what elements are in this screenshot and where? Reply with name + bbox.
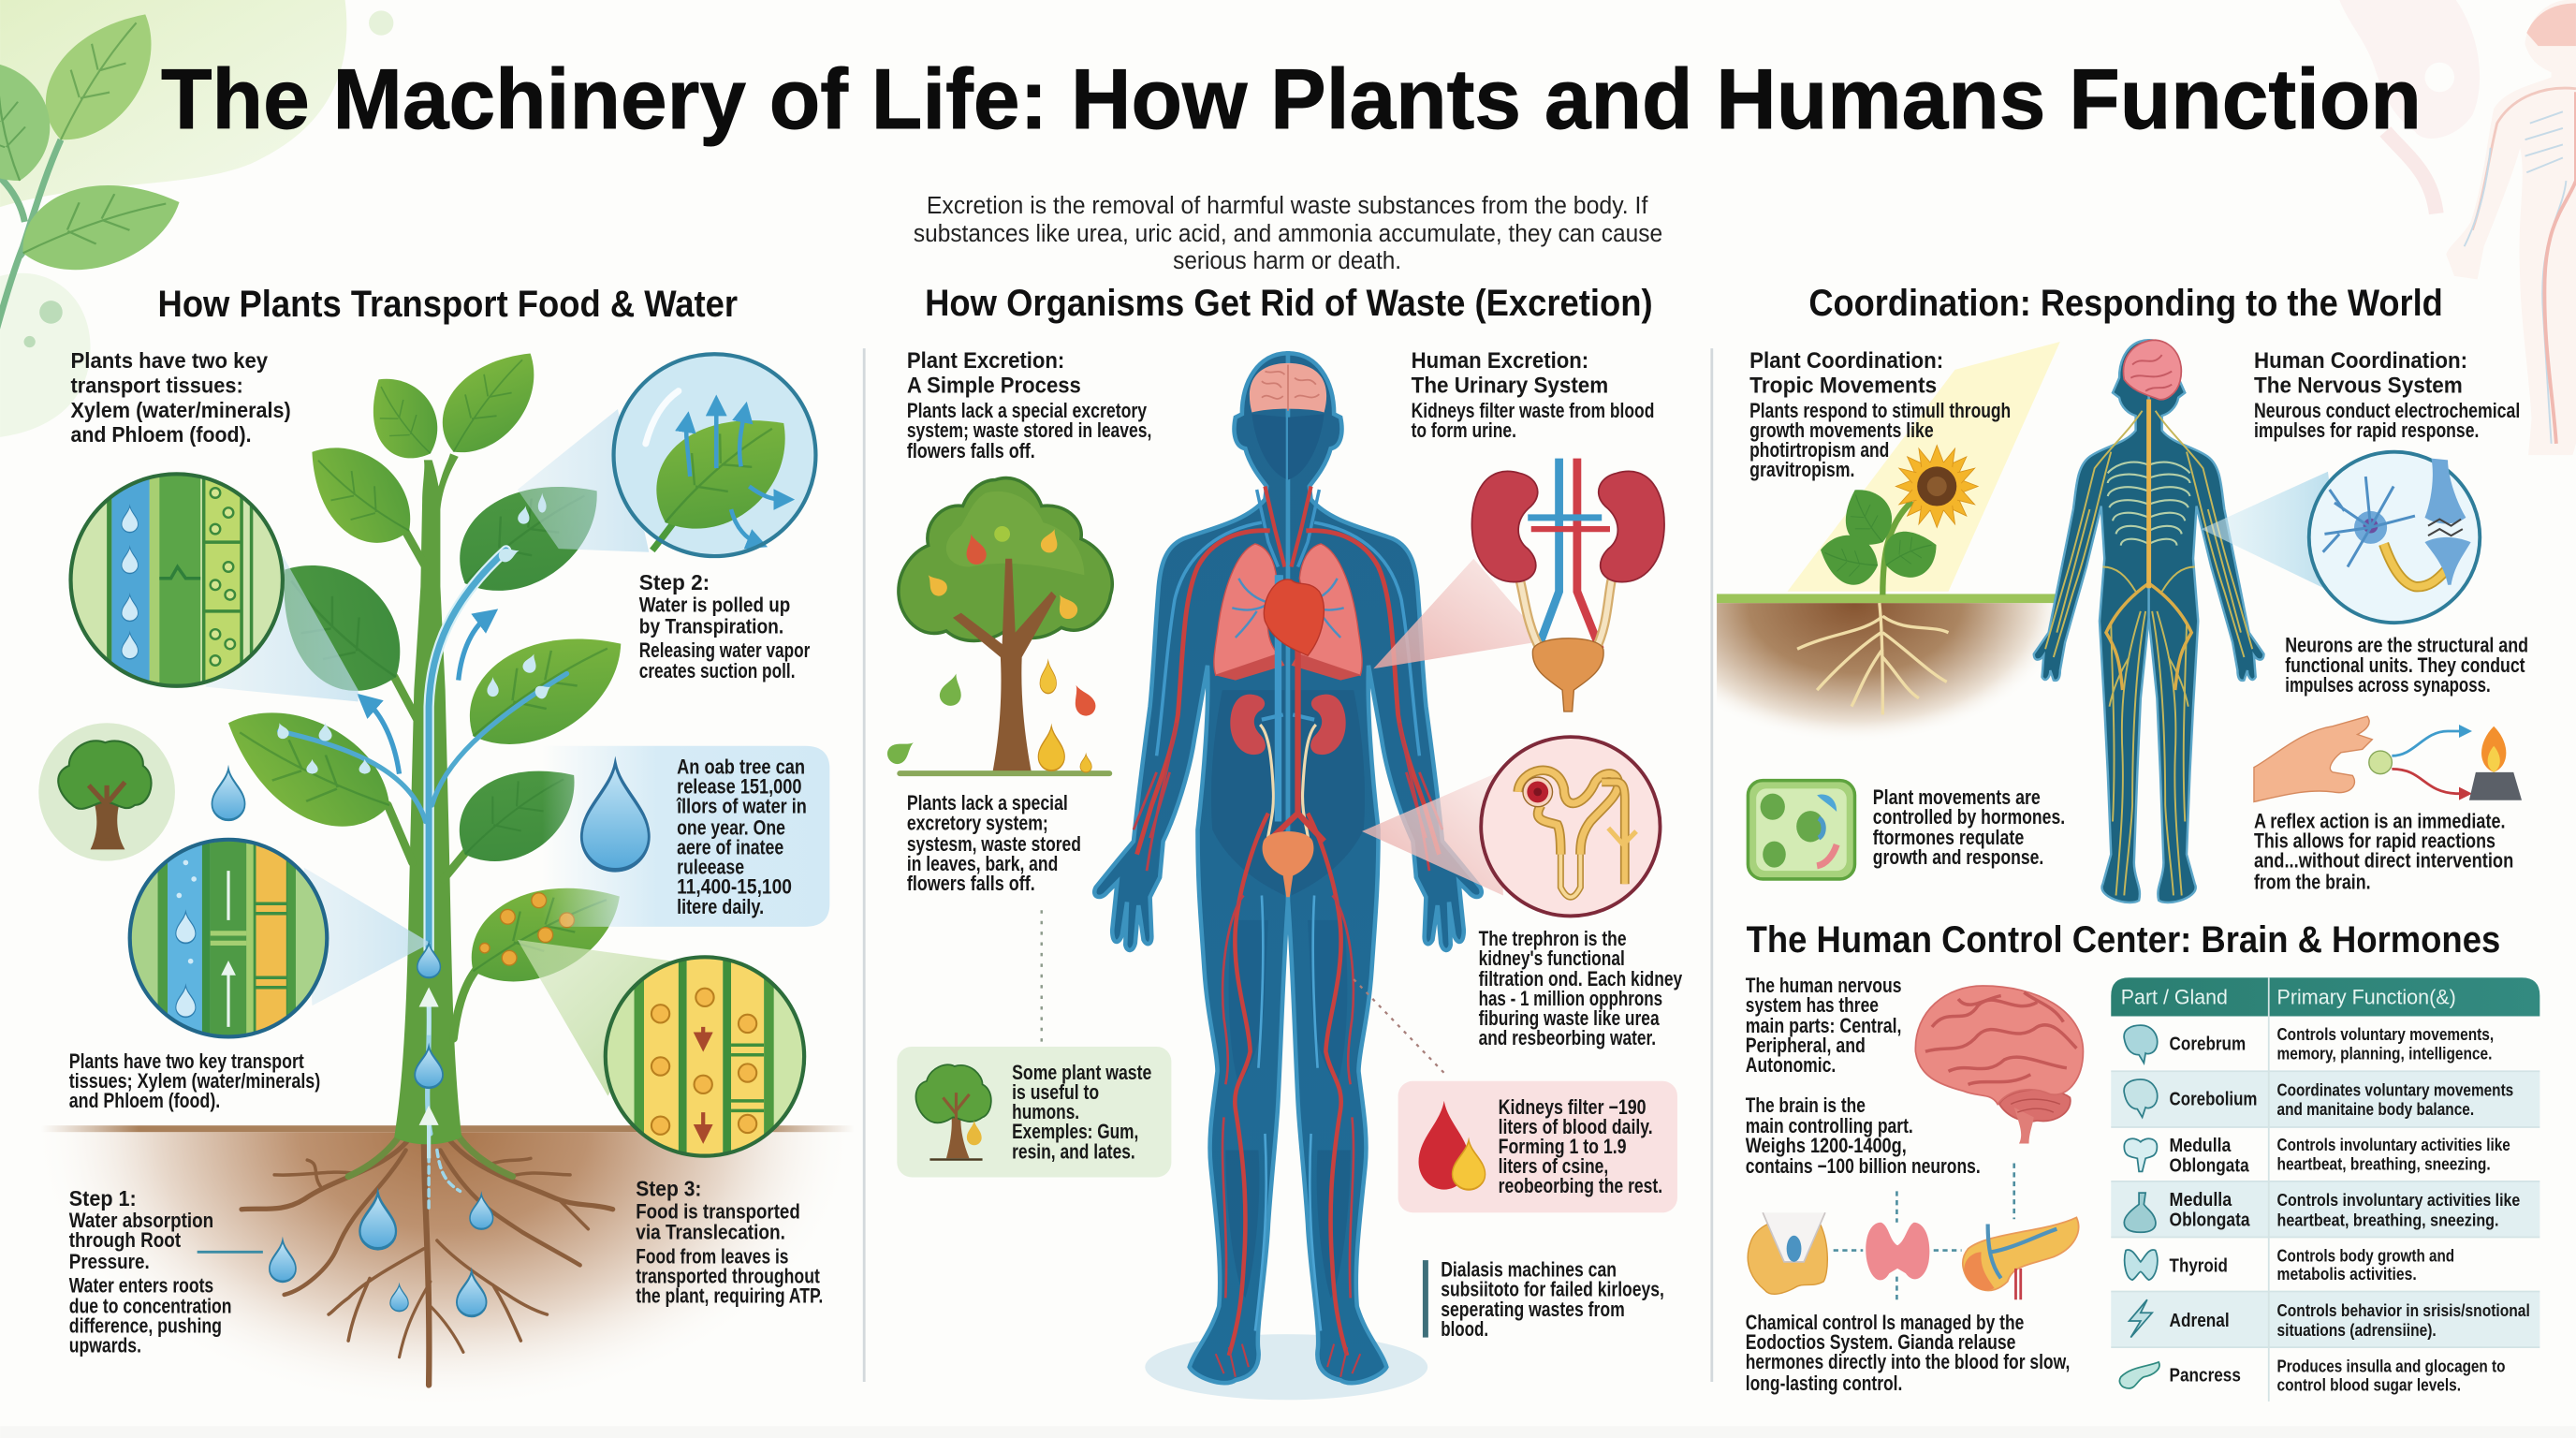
- intro text: [914, 191, 1662, 274]
- text: human coordination: Human Coordination:: [2254, 348, 2467, 374]
- table: parts and functions: [2111, 977, 2539, 1401]
- panel: excretion: [884, 283, 1682, 1400]
- heading: plant transport: How Plants Transport Food & Water: [158, 284, 738, 325]
- text: plant coordination: Plants respond to stimull through: [1749, 399, 2011, 422]
- dashed connectors: [1834, 1164, 2014, 1299]
- plant leaves: [206, 330, 643, 1005]
- text: human coordination: The Nervous System: [2254, 373, 2463, 398]
- text: step 1: through Root: [69, 1228, 181, 1252]
- illustration: sunlight and soil: [1717, 342, 2062, 742]
- row: cerebellum: Corebolium: [2170, 1090, 2257, 1110]
- blue flow arrows: [368, 618, 487, 774]
- text: key tissues: Plants have two key: [71, 348, 268, 373]
- row: medulla oblongata: [2124, 1135, 2510, 1176]
- text: human coordination: impulses for rapid response.: [2254, 418, 2479, 442]
- illustration: neuron circle: [2202, 452, 2480, 623]
- row: thyroid: [2125, 1245, 2454, 1284]
- table header: Primary Function(&): [2277, 985, 2456, 1008]
- text: nephron: [1479, 927, 1682, 1049]
- panel: control center: [1746, 919, 2539, 1401]
- callout: kidney filtration: Forming 1 to 1.9: [1499, 1135, 1627, 1158]
- row: cerebellum: [2124, 1079, 2513, 1119]
- text: step 3: via Translecation.: [636, 1220, 785, 1243]
- row: medulla oblongata repeat: Medulla: [2170, 1190, 2232, 1211]
- callout: useful plant waste: is useful to: [1012, 1080, 1099, 1104]
- note: dialysis: blood.: [1441, 1317, 1488, 1341]
- callout: oak tree fact: [542, 746, 829, 927]
- text: human excretion: Human Excretion:: [1412, 348, 1588, 374]
- text: key tissues: and Phloem (food).: [71, 422, 252, 447]
- leaf water dots and yellow food dots: [274, 493, 574, 965]
- text: step 1: due to concentration: [69, 1294, 232, 1317]
- brain: [1250, 363, 1326, 413]
- text: step 3: Food from leaves is: [636, 1245, 788, 1269]
- table header: Part / Gland: [2121, 985, 2228, 1008]
- callout: oak tree fact: îllors of water in: [676, 795, 807, 818]
- dotted connector: [1041, 910, 1043, 1043]
- text: plant coordination: photirtropism and: [1749, 438, 1889, 462]
- text: key tissues: [71, 348, 291, 447]
- vessels: [1276, 575, 1281, 822]
- illustration: human body shadow: [1145, 1334, 1427, 1400]
- row: medulla oblongata repeat: heartbeat, breathing, sneezing.: [2277, 1210, 2498, 1229]
- text: reflex: from the brain.: [2254, 870, 2371, 893]
- text: brain facts: [1746, 1093, 1981, 1178]
- icon: blood and urine drops: [1419, 1101, 1486, 1190]
- text: reflex: and...without direct intervention: [2254, 849, 2513, 873]
- text: plant hormones: Plant movements are: [1873, 785, 2041, 809]
- text: step 3: Step 3:: [636, 1177, 701, 1201]
- illustration: sunflower: [1797, 446, 1978, 714]
- text: plant coordination: growth movements like: [1749, 418, 1934, 442]
- soil and ground: [33, 1125, 855, 1410]
- text: tissues recap: Plants have two key transport: [69, 1049, 304, 1073]
- panel: coordination: [1717, 283, 2528, 902]
- text: nervous system parts: [1746, 974, 1902, 1077]
- decoration: top-left leaves: [0, 0, 393, 437]
- text: tissues recap: and Phloem (food).: [69, 1089, 220, 1112]
- panel: plant transport: [33, 284, 855, 1410]
- pointer line: [198, 1251, 263, 1253]
- text: nephron: and resbeorbing water.: [1479, 1026, 1656, 1049]
- illustration: nephron circle: [1362, 737, 1661, 916]
- intro text: Excretion is the removal of harmful waste substances from the body. If: [927, 191, 1648, 219]
- row: medulla oblongata: Medulla: [2170, 1136, 2232, 1156]
- dotted connector: [1354, 979, 1444, 1073]
- cone to leaf circle: [518, 409, 649, 552]
- row: thyroid: Thyroid: [2170, 1255, 2228, 1276]
- text: neurons: [2285, 634, 2528, 697]
- row: adrenal: Controls behavior in srisis/snotional: [2277, 1300, 2530, 1320]
- text: step 3: [636, 1177, 823, 1308]
- text: chemical control: hermones directly into the blood for slow,: [1746, 1350, 2070, 1373]
- text: human excretion: to form urine.: [1412, 418, 1516, 442]
- callout: oak tree fact: one year. One: [677, 816, 785, 840]
- intro text: serious harm or death.: [1173, 246, 1401, 274]
- text: step 1: Step 1:: [69, 1186, 137, 1211]
- illustration: glands: [1748, 1212, 2079, 1299]
- text: brain facts: main controlling part.: [1746, 1114, 1913, 1137]
- icon: small drop: [212, 769, 245, 820]
- note: dialysis: Dialasis machines can: [1441, 1258, 1617, 1282]
- text: plants lack: excretory system;: [907, 811, 1048, 834]
- text: human excretion: Kidneys filter waste from blood: [1412, 399, 1654, 422]
- text: nervous system parts: Autonomic.: [1746, 1053, 1836, 1077]
- text: tissues recap: tissues; Xylem (water/minerals): [69, 1069, 320, 1093]
- icon: plant cell: [1748, 781, 1854, 879]
- circle: transpiration leaf: [614, 354, 815, 556]
- text: nephron: has - 1 million opphrons: [1479, 987, 1662, 1010]
- icon: tree badge: [38, 723, 175, 861]
- text: nephron: filtration ond. Each kidney: [1479, 967, 1682, 990]
- text: plant excretion: Plants lack a special excretory: [907, 399, 1147, 422]
- row: medulla oblongata: Oblongata: [2170, 1155, 2249, 1176]
- row: pancreas: Pancress: [2170, 1366, 2241, 1387]
- water veins: [279, 550, 567, 1208]
- text: reflex: This allows for rapid reactions: [2254, 829, 2496, 853]
- text: plant excretion: A Simple Process: [907, 373, 1081, 398]
- stem droplets and arrows: [415, 943, 443, 1158]
- text: chemical control: [1746, 1311, 2070, 1395]
- callout: useful plant waste: Exemples: Gum,: [1012, 1120, 1138, 1143]
- brain: [2123, 340, 2181, 400]
- row: medulla oblongata: heartbeat, breathing, sneezing.: [2277, 1154, 2491, 1174]
- text: chemical control: Eodoctios System. Gianda relause: [1746, 1330, 2015, 1354]
- row: adrenal: Adrenal: [2170, 1311, 2230, 1331]
- callout: useful plant waste: [897, 1047, 1171, 1177]
- divider right: [1711, 348, 1713, 1382]
- row: cerebrum: memory, planning, intelligence.: [2277, 1043, 2492, 1063]
- stem and branches: [388, 453, 476, 1144]
- text: step 3: Food is transported: [636, 1199, 800, 1223]
- bladder: [1263, 831, 1313, 897]
- row: cerebrum: [2124, 1024, 2494, 1064]
- text: neurons: impulses across synaposs.: [2285, 673, 2491, 697]
- text: nervous system parts: Peripheral, and: [1746, 1034, 1866, 1057]
- text: step 3: transported throughout: [636, 1265, 820, 1288]
- row: cerebrum: Controls voluntary movements,: [2277, 1024, 2494, 1044]
- row: medulla oblongata: Controls involuntary activities like: [2277, 1135, 2510, 1154]
- cone to stem circle: [304, 868, 431, 1005]
- text: reflex: [2254, 810, 2513, 893]
- text: brain facts: Weighs 1200-1400g,: [1746, 1134, 1907, 1157]
- root water drops: [270, 1193, 493, 1316]
- spinal cord: [2147, 399, 2150, 588]
- text: plant excretion: Plant Excretion:: [907, 348, 1064, 374]
- text: brain facts: contains −100 billion neurons.: [1746, 1154, 1981, 1178]
- text: nephron: fiburing waste like urea: [1479, 1006, 1660, 1030]
- text: nervous system parts: system has three: [1746, 993, 1879, 1017]
- text: step 2: Step 2:: [639, 570, 710, 594]
- illustration: human circulatory body: [1094, 353, 1482, 1383]
- divider left: [863, 348, 865, 1382]
- icon: tree with resin: [915, 1064, 991, 1161]
- heading: control center: The Human Control Center: Brain & Hormones: [1747, 919, 2500, 961]
- intro text: substances like urea, uric acid, and ammonia accumulate, they can cause: [914, 219, 1662, 247]
- text: plant hormones: ftormones requlate: [1873, 826, 2024, 849]
- callout: useful plant waste: humons.: [1012, 1100, 1079, 1123]
- row: cerebellum: and manitaine body balance.: [2277, 1099, 2474, 1119]
- note: dialysis: seperating wastes from: [1441, 1298, 1625, 1321]
- text: nervous system parts: The human nervous: [1746, 974, 1902, 997]
- callout: kidney filtration: liters of csine,: [1499, 1154, 1608, 1178]
- callout: oak tree fact: litere daily.: [677, 895, 764, 918]
- text: step 1: difference, pushing: [69, 1313, 222, 1337]
- text: step 2: Releasing water vapor: [639, 638, 811, 662]
- callout: kidney filtration: reobeorbing the rest.: [1499, 1174, 1662, 1197]
- row: thyroid: Controls body growth and: [2277, 1245, 2454, 1265]
- callout: oak tree fact: An oab tree can: [677, 756, 805, 779]
- text: step 2: by Transpiration.: [639, 615, 783, 638]
- text: tissues recap: [69, 1049, 320, 1112]
- text: neurons: functional units. They conduct: [2285, 653, 2525, 677]
- text: plant hormones: [1873, 785, 2065, 869]
- circle: xylem and phloem tissue: [71, 473, 285, 687]
- text: reflex: A reflex action is an immediate.: [2254, 810, 2505, 833]
- text: step 2: Water is polled up: [639, 594, 790, 617]
- row: pancreas: control blood sugar levels.: [2277, 1375, 2461, 1395]
- text: plants lack: in leaves, bark, and: [907, 852, 1058, 875]
- row: cerebellum: Coordinates voluntary movements: [2277, 1080, 2513, 1100]
- row: medulla oblongata repeat: Controls involuntary activities like: [2277, 1190, 2520, 1210]
- text: step 2: creates suction poll.: [639, 659, 795, 682]
- text: key tissues: Xylem (water/minerals): [71, 398, 291, 422]
- text: human excretion: The Urinary System: [1412, 373, 1608, 398]
- text: plant excretion: system; waste stored in leaves,: [907, 418, 1151, 442]
- roots: [242, 1134, 613, 1385]
- row: cerebrum: Corebrum: [2170, 1034, 2246, 1054]
- icon: large water drop: [581, 763, 649, 870]
- row: pancreas: Produces insulla and glocagen to: [2277, 1356, 2505, 1375]
- text: step 1: Pressure.: [69, 1250, 150, 1273]
- text: plant excretion: [907, 348, 1151, 462]
- text: plants lack: Plants lack a special: [907, 791, 1068, 814]
- text: nephron: kidney's functional: [1479, 946, 1625, 970]
- table header: [2111, 977, 2539, 1016]
- text: plants lack: systesm, waste stored: [907, 832, 1081, 856]
- text: chemical control: long-lasting control.: [1746, 1372, 1902, 1395]
- row: medulla oblongata repeat: [2124, 1190, 2520, 1232]
- circle: stem tissue: [130, 838, 329, 1042]
- illustration: nervous system body: [2034, 340, 2263, 902]
- text: human excretion: [1412, 348, 1654, 442]
- text: step 1: Water absorption: [69, 1209, 213, 1232]
- callout: kidney filtration: liters of blood daily.: [1499, 1115, 1653, 1138]
- text: plant coordination: gravitropism.: [1749, 458, 1854, 481]
- text: key tissues: transport tissues:: [71, 373, 243, 397]
- text: human coordination: Neurous conduct electrochemical: [2254, 399, 2520, 422]
- text: plant hormones: controlled by hormones.: [1873, 805, 2065, 829]
- text: human coordination: [2254, 348, 2520, 442]
- row: adrenal: situations (adrensiine).: [2277, 1320, 2437, 1340]
- row: thyroid: metabolis activities.: [2277, 1264, 2417, 1284]
- illustration: reflex hand and flame: [2254, 716, 2522, 801]
- text: chemical control: Chamical control Is managed by the: [1746, 1311, 2024, 1334]
- text: plant hormones: growth and response.: [1873, 845, 2043, 869]
- row: adrenal: [2130, 1299, 2530, 1340]
- row: medulla oblongata repeat: Oblongata: [2170, 1210, 2250, 1230]
- text: plant coordination: Plant Coordination:: [1749, 348, 1943, 374]
- callout: oak tree fact: aere of inatee: [677, 836, 783, 859]
- callout: oak tree fact: release 151,000: [677, 775, 802, 799]
- text: plants lack: flowers falls off.: [907, 872, 1035, 895]
- illustration: kidneys and urinary system: [1373, 459, 1664, 712]
- text: neurons: Neurons are the structural and: [2285, 634, 2528, 657]
- decoration: top-right faint human figure: [2339, 0, 2576, 455]
- text: brain facts: The brain is the: [1746, 1093, 1866, 1117]
- row: pancreas: [2119, 1356, 2505, 1395]
- text: step 3: the plant, requiring ATP.: [636, 1284, 823, 1308]
- callout: useful plant waste: Some plant waste: [1012, 1061, 1151, 1084]
- illustration: tree with waste: [884, 478, 1112, 776]
- heart: [1264, 580, 1324, 655]
- text: nephron: The trephron is the: [1479, 927, 1627, 950]
- callout: oak tree fact: 11,400-15,100: [677, 875, 792, 899]
- title: The Machinery of Life: How Plants and Humans Function: [161, 51, 2422, 147]
- callout: oak tree fact: ruleease: [677, 856, 744, 879]
- callout: kidney filtration: [1398, 1081, 1677, 1212]
- text: plants lack: [907, 791, 1081, 895]
- text: nervous system parts: main parts: Central,: [1746, 1014, 1902, 1037]
- heading: excretion: How Organisms Get Rid of Waste (Excretion): [925, 283, 1653, 324]
- heading: coordination: Coordination: Responding to the World: [1808, 283, 2443, 324]
- text: plant coordination: Tropic Movements: [1749, 373, 1937, 398]
- text: step 1: Water enters roots: [69, 1273, 213, 1297]
- circle: phloem tissue: [605, 956, 805, 1160]
- text: step 2: [639, 570, 811, 682]
- callout: useful plant waste: resin, and lates.: [1012, 1139, 1135, 1163]
- cone to xylem circle: [205, 555, 359, 701]
- cone to phloem circle: [518, 940, 685, 1096]
- note: dialysis: [1423, 1258, 1664, 1341]
- text: step 1: [69, 1186, 232, 1357]
- callout: kidney filtration: Kidneys filter −190: [1499, 1095, 1647, 1119]
- text: step 1: upwards.: [69, 1333, 141, 1357]
- note: dialysis: subsiitoto for failed kirloeys,: [1441, 1278, 1664, 1301]
- illustration: brain: [1915, 986, 2083, 1143]
- text: plant excretion: flowers falls off.: [907, 439, 1035, 462]
- text: plant coordination: [1749, 348, 2011, 481]
